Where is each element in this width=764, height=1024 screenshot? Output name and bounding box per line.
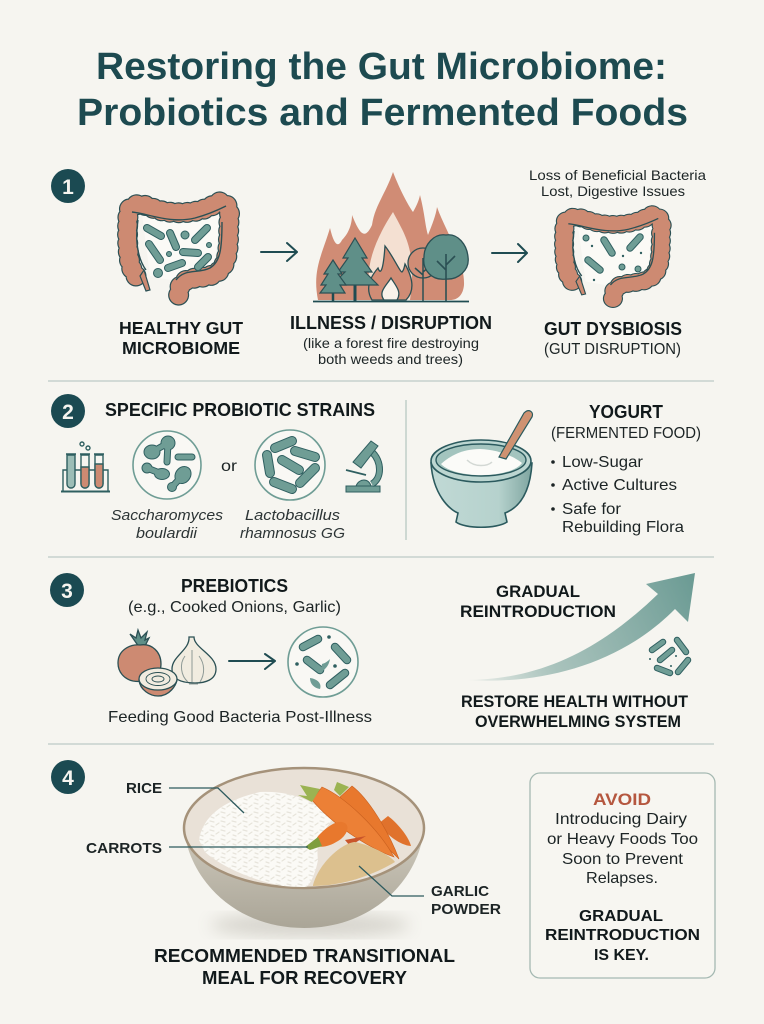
labels: strains: boulardii — [136, 525, 198, 542]
label: garlic powder — [359, 866, 501, 918]
panel: avoid: Introducing Dairy — [555, 811, 687, 828]
badge: step 4 — [51, 760, 85, 794]
badge: step 1: 1 — [62, 176, 74, 199]
label: dysbiosis — [544, 319, 682, 358]
label: healthy gut: MICROBIOME — [122, 338, 240, 358]
icon: forest fire — [313, 172, 469, 302]
panel: avoid: REINTRODUCTION — [545, 927, 700, 944]
labels: strains — [111, 507, 345, 542]
caption: transitional meal — [154, 945, 455, 988]
caption: transitional meal: RECOMMENDED TRANSITIONAL — [154, 945, 455, 966]
label: rice: RICE — [126, 780, 162, 797]
text: yogurt: Rebuilding Flora — [562, 519, 684, 536]
label: illness — [290, 313, 492, 367]
labels: strains: rhamnosus GG — [240, 525, 345, 542]
heading: prebiotics: PREBIOTICS — [181, 576, 288, 596]
icon: test tubes — [61, 442, 110, 492]
arrow — [229, 654, 275, 669]
icon: microscope — [346, 441, 380, 492]
icon: dysbiosis gut — [564, 215, 662, 303]
panel: avoid: Relapses. — [586, 870, 658, 887]
caption: transitional meal: MEAL FOR RECOVERY — [202, 967, 408, 988]
title — [77, 46, 688, 134]
label: illness: (like a forest fire destroying — [303, 335, 479, 351]
icon: yogurt bowl — [431, 411, 532, 527]
arrow: rising recovery — [465, 573, 695, 681]
badge: step 1 — [51, 169, 85, 203]
arrow — [261, 243, 297, 261]
panel: avoid: or Heavy Foods Too — [547, 831, 698, 848]
text: yogurt: YOGURT — [589, 402, 663, 422]
label: garlic powder: GARLIC — [431, 883, 489, 900]
text: yogurt: (FERMENTED FOOD) — [551, 425, 701, 442]
icon: small bacteria — [649, 640, 688, 673]
panel: avoid — [530, 773, 715, 978]
label: garlic powder: POWDER — [431, 901, 501, 918]
heading: prebiotics — [128, 576, 341, 616]
panel: avoid: GRADUAL — [579, 908, 663, 925]
title: Restoring the Gut Microbiome: — [96, 46, 667, 88]
icon: nourished bacteria circle — [288, 627, 358, 697]
text: restore health — [461, 692, 689, 731]
heading: gradual reintroduction: GRADUAL — [496, 582, 580, 601]
heading: probiotic strains: SPECIFIC PROBIOTIC STRAINS — [105, 400, 375, 420]
badge: step 2 — [51, 394, 85, 428]
panel: avoid: IS KEY. — [594, 947, 649, 964]
label: dysbiosis: GUT DYSBIOSIS — [544, 319, 682, 339]
badge: step 3: 3 — [61, 580, 73, 603]
text: restore health: RESTORE HEALTH WITHOUT — [461, 692, 689, 711]
badge: step 4: 4 — [62, 767, 74, 790]
label: carrots: CARROTS — [86, 840, 162, 857]
panel: avoid: Soon to Prevent — [562, 851, 684, 868]
caption: loss of bacteria: Loss of Beneficial Bacteria — [529, 167, 706, 183]
heading: prebiotics: (e.g., Cooked Onions, Garlic) — [128, 599, 341, 616]
icon: healthy gut — [128, 202, 230, 300]
text: restore health: OVERWHELMING SYSTEM — [475, 712, 681, 731]
text: yogurt: Safe for — [562, 501, 622, 518]
label: rice — [126, 780, 244, 813]
caption: loss of bacteria — [529, 167, 706, 199]
text: yogurt: Active Cultures — [562, 477, 677, 494]
heading: gradual reintroduction: REINTRODUCTION — [460, 602, 616, 621]
label: healthy gut — [119, 318, 243, 358]
badge: step 3 — [50, 573, 84, 607]
labels: strains: Saccharomyces — [111, 507, 224, 524]
label: illness: ILLNESS / DISRUPTION — [290, 313, 492, 333]
label: illness: both weeds and trees) — [318, 351, 463, 367]
icon: lactobacillus circle — [255, 430, 325, 500]
label: healthy gut: HEALTHY GUT — [119, 318, 243, 338]
badge: step 2: 2 — [62, 401, 74, 424]
icon: yeast circle — [133, 431, 201, 499]
icon: onion and garlic — [118, 630, 216, 696]
label: dysbiosis: (GUT DISRUPTION) — [544, 341, 681, 358]
heading: gradual reintroduction — [460, 582, 616, 621]
photo: meal bowl — [184, 768, 424, 937]
caption: feeding bacteria: Feeding Good Bacteria Post-Illness — [108, 709, 372, 726]
text: yogurt: Low-Sugar — [562, 454, 644, 471]
text: yogurt — [551, 402, 701, 536]
arrow — [492, 244, 527, 262]
text: or: or — [221, 458, 238, 475]
title: Probiotics and Fermented Foods — [77, 92, 688, 134]
caption: loss of bacteria: Lost, Digestive Issues — [541, 183, 685, 199]
labels: strains: Lactobacillus — [245, 507, 341, 524]
panel: avoid: AVOID — [593, 790, 651, 809]
